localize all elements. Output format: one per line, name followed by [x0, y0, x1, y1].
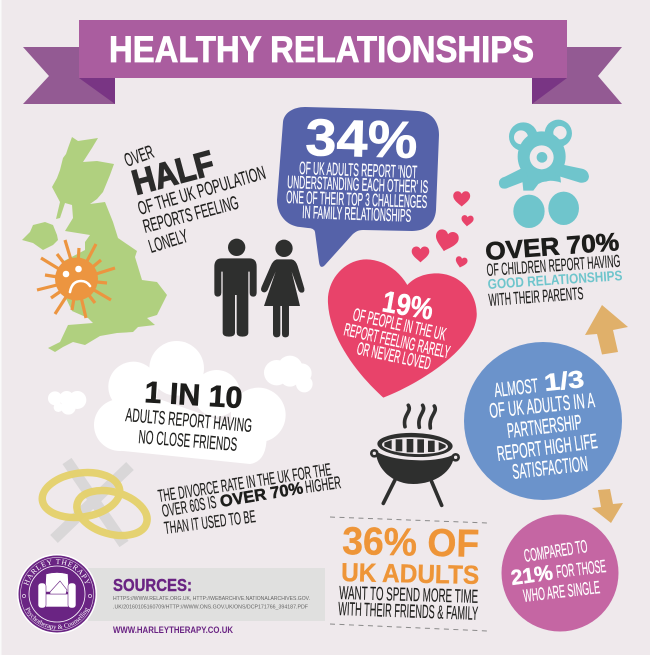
small hearts [412, 191, 474, 269]
text block: 36% of UK adults: WITH THEIR FRIENDS & FAMILY [338, 599, 479, 625]
big heart: 19%: OR NEVER LOVED [355, 338, 433, 374]
text block: over half: REPORTS FEELING [141, 193, 241, 238]
text block: over half [122, 142, 268, 258]
website link: WWW.HARLEYTHERAPY.CO.UK [113, 625, 233, 636]
speech bubble: 34% [277, 107, 439, 267]
text block: divorce rate [157, 459, 342, 538]
big heart: 19% [328, 259, 477, 398]
text: UNDERSTANDING EACH OTHER' IS [287, 172, 428, 197]
text block: 36% of UK adults: UK ADULTS [341, 557, 479, 590]
sources panel: SOURCES: [113, 575, 192, 595]
small cloud: right [264, 356, 313, 392]
text block: divorce rate: THAN IT USED TO BE [163, 506, 257, 538]
text block: over half: OVER [122, 142, 157, 172]
text block: over half: LONELY [146, 226, 191, 258]
icon: man and woman [214, 239, 304, 337]
text block: over half: HALF [128, 144, 218, 203]
text block: divorce rate: THE DIVORCE RATE IN THE UK FOR THE [157, 459, 333, 506]
title banner [23, 20, 622, 104]
icon: barbecue [371, 405, 459, 505]
circle: almost 1/3 [464, 342, 622, 500]
logo: Harley Therapy: HARLEY THERAPY [24, 559, 90, 586]
big heart: 19%: 19% [380, 285, 436, 327]
title: HEALTHY RELATIONSHIPS [109, 29, 534, 70]
logo: Harley Therapy: Psychotherapy & Counselling [25, 606, 90, 630]
speech bubble: 34%: IN FAMILY RELATIONSHIPS [302, 202, 411, 226]
cloud: 1 in 10 [94, 341, 286, 464]
circle: compared to 21% [502, 514, 618, 632]
logo: Harley Therapy [17, 554, 97, 634]
text block: over 70%: OVER 70% [484, 228, 620, 266]
arrow: up [585, 305, 628, 354]
text block: over half: OF THE UK POPULATION [136, 163, 268, 220]
sources panel [88, 568, 325, 621]
circle: almost 1/3: 1/3 [543, 366, 585, 397]
text block: 36% of UK adults: 36% OF [342, 520, 480, 566]
big heart: 19%: OF PEOPLE IN THE UK [351, 304, 448, 344]
text block: divorce rate: OVER 60S IS [160, 492, 218, 521]
text block: 36% of UK adults: WANT TO SPEND MORE TIME [339, 583, 478, 608]
speech bubble: 34%: 34% [305, 109, 418, 170]
circle: almost 1/3: ALMOST [493, 375, 539, 402]
arrow: down [592, 489, 623, 523]
sources panel: HTTPS://WWW.RELATE.ORG.UK, HTTP://WEBARCHIVE.NATIONALARCHIVES.GOV. [113, 596, 310, 602]
icon: wedding rings with cross [39, 461, 152, 544]
sources panel: .UK/20160105160709/HTTP://WWW.ONS.GOV.UK/ONS/DCP171766_394187.PDF [113, 604, 309, 610]
text block: 36% of UK adults [330, 517, 488, 631]
cloud: 1 in 10: ADULTS REPORT HAVING [125, 405, 253, 437]
cloud: 1 in 10: 1 IN 10 [144, 376, 243, 415]
text block: divorce rate: HIGHER [304, 472, 342, 497]
speech bubble: 34%: OF UK ADULTS REPORT 'NOT [299, 158, 417, 182]
circle: compared to 21%: 21% [509, 561, 555, 590]
icon: sad sun [37, 240, 115, 318]
text block: over 70% [484, 228, 623, 310]
icon: teddy bear [499, 120, 589, 228]
cloud: 1 in 10: NO CLOSE FRIENDS [138, 427, 238, 456]
text block: divorce rate: OVER 70% [219, 479, 305, 511]
text: ONE OF THEIR TOP 3 CHALLENGES [286, 187, 427, 212]
big heart: 19%: REPORT FEELING RARELY [342, 319, 452, 362]
small cloud: left [48, 391, 86, 415]
text block: over 70%: GOOD RELATIONSHIPS [487, 267, 623, 292]
map of the UK [22, 137, 167, 352]
